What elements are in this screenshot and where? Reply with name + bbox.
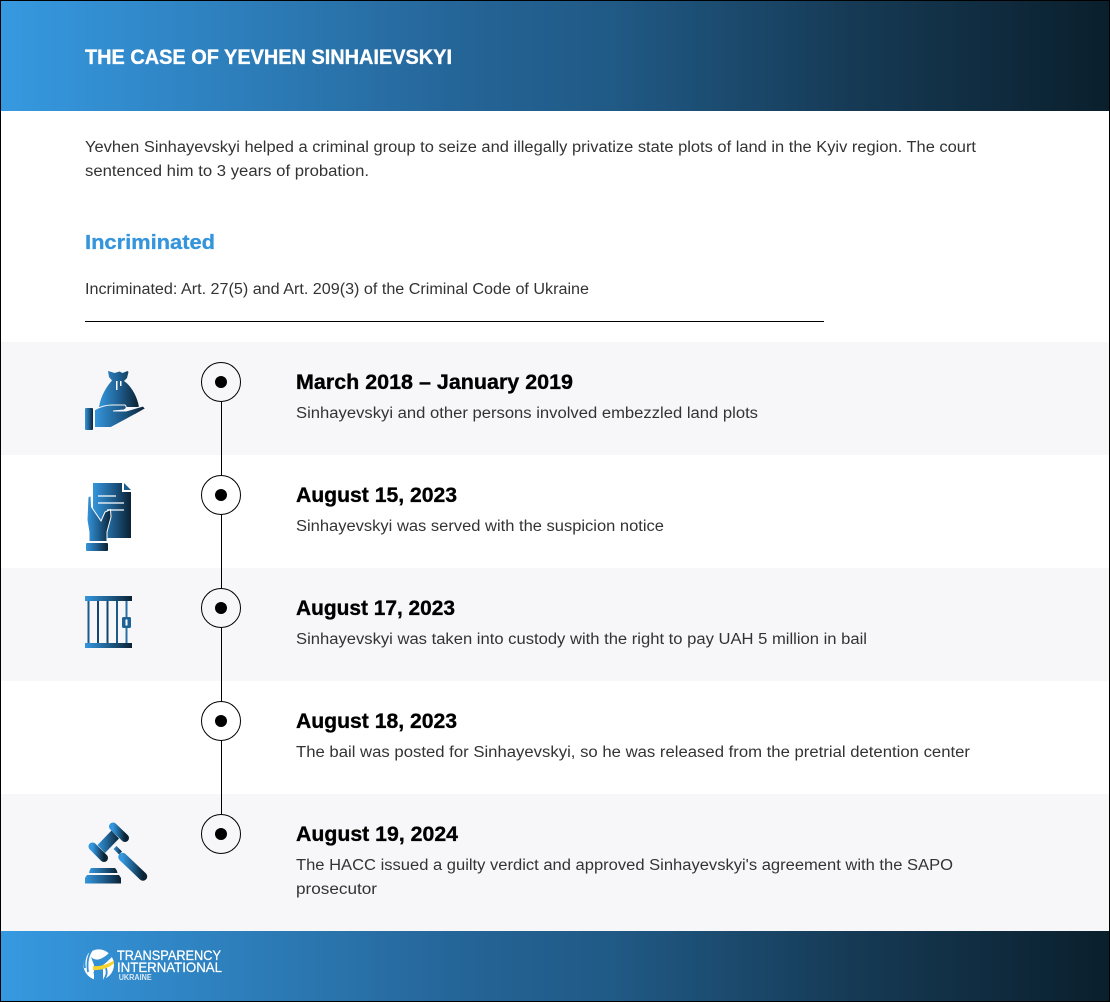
row 4 text: August 18, 2023 — [296, 710, 457, 733]
row 2 text: August 15, 2023 — [296, 484, 457, 507]
row 2 text: Sinhayevskyi was served with the suspicion notice — [296, 518, 664, 535]
timeline marker 3 — [202, 588, 240, 628]
icon: prison bars — [85, 596, 132, 648]
row 5 text — [296, 823, 953, 898]
logo: Transparency International Ukraine — [83, 948, 222, 982]
row 3 text: Sinhayevskyi was taken into custody with the right to pay UAH 5 million in bail — [296, 631, 867, 648]
timeline line — [221, 400, 222, 816]
logo: Transparency International Ukraine: INTERNATIONAL — [117, 960, 222, 975]
row 1 background — [1, 342, 1109, 455]
timeline marker 1 — [202, 362, 240, 402]
row 1 text: Sinhayevskyi and other persons involved embezzled land plots — [296, 405, 758, 422]
row 2 text — [296, 484, 664, 535]
timeline marker 4 — [202, 702, 240, 740]
row 5 text: The HACC issued a guilty verdict and approved Sinhayevskyi's agreement with the SAPO — [296, 857, 953, 874]
row 1 text: March 2018 – January 2019 — [296, 371, 573, 394]
intro text: sentenced him to 3 years of probation. — [85, 163, 369, 180]
heading: incriminated: Incriminated — [85, 231, 215, 254]
icon: gavel — [85, 826, 143, 884]
row 3 text: August 17, 2023 — [296, 597, 455, 620]
header banner — [1, 1, 1109, 111]
intro text — [85, 139, 977, 180]
logo: Transparency International Ukraine: TRANSPARENCY — [117, 948, 221, 963]
row 4 text: The bail was posted for Sinhayevskyi, so he was released from the pretrial detention center — [296, 744, 970, 761]
icon: hand with document — [86, 483, 131, 551]
title: THE CASE OF YEVHEN SINHAIEVSKYI — [85, 45, 452, 69]
row 5 text: prosecutor — [296, 881, 377, 898]
intro text: Yevhen Sinhayevskyi helped a criminal group to seize and illegally privatize state plots of land in the Kyiv region. The court — [85, 139, 977, 156]
icon: money bag on hand — [85, 371, 146, 430]
timeline marker 5 — [202, 814, 240, 854]
row 3 background — [1, 568, 1109, 681]
row 5 background — [1, 794, 1109, 931]
row 4 text — [296, 710, 970, 761]
incriminated text: Incriminated: Art. 27(5) and Art. 209(3) of the Criminal Code of Ukraine — [85, 281, 589, 298]
footer banner — [1, 931, 1109, 1001]
row 3 text — [296, 597, 867, 648]
timeline marker 2 — [202, 476, 240, 514]
logo: Transparency International Ukraine: UKRAINE — [119, 973, 152, 982]
row 5 text: August 19, 2024 — [296, 823, 458, 846]
row 1 text — [296, 371, 758, 422]
